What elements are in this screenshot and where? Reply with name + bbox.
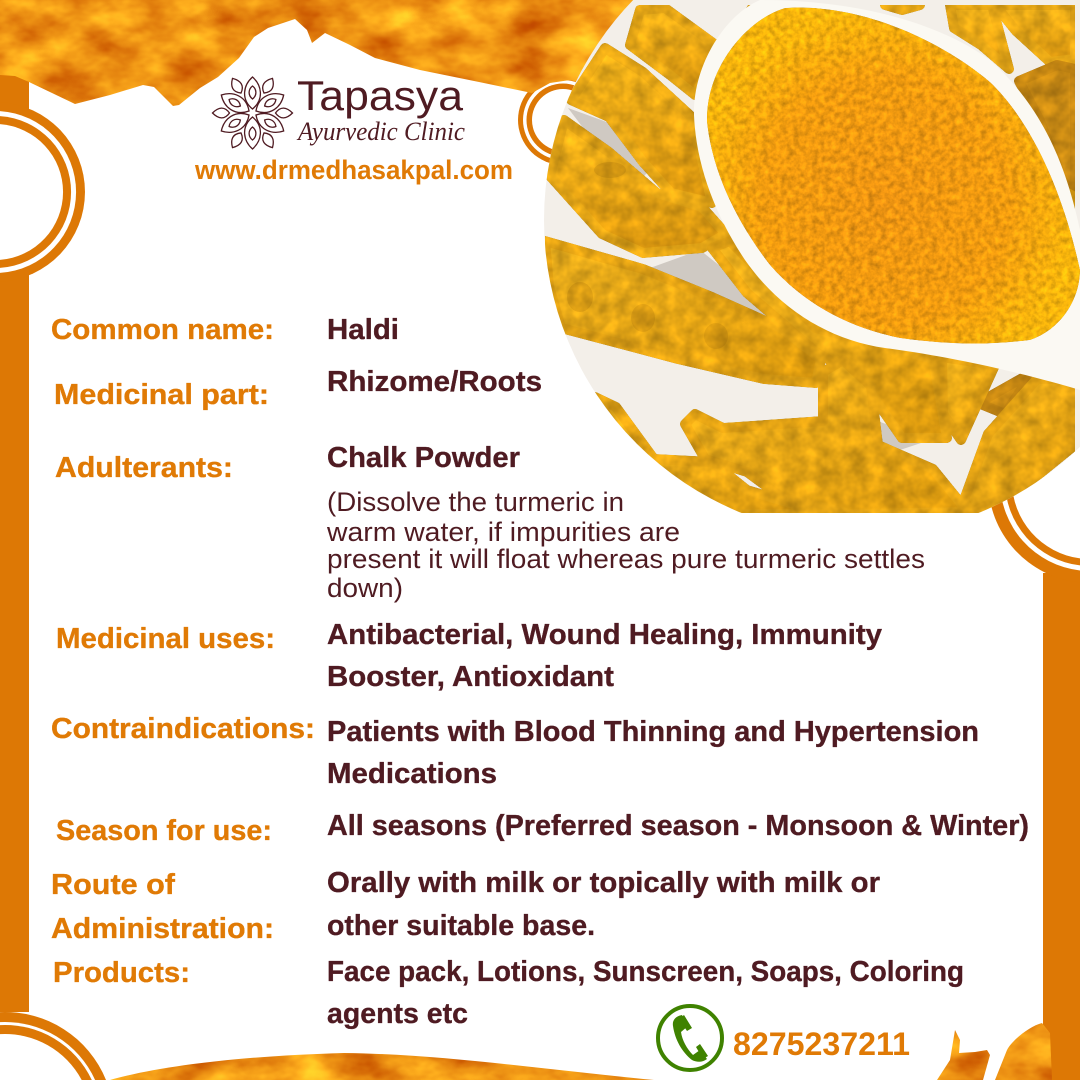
logo tagline: Ayurvedic Clinic (296, 117, 465, 146)
row: medicinal uses: Booster, Antioxidant (327, 661, 614, 693)
icon: phone (658, 1006, 722, 1070)
turmeric texture: bottom wave (110, 1053, 654, 1080)
phone number: 8275237211 (733, 1026, 910, 1062)
ring: top right (518, 75, 608, 165)
photo shadows (568, 108, 930, 450)
row: route of administration: Administration: (51, 913, 274, 945)
ring: bottom left (0, 1012, 106, 1080)
row: common name: Haldi (327, 314, 399, 346)
website url: www.drmedhasakpal.com (194, 155, 513, 185)
row: medicinal uses: Medicinal uses: (56, 623, 275, 655)
photo background (540, 0, 1080, 520)
icon: mandala (212, 76, 292, 150)
row: contraindications: Medications (327, 758, 497, 790)
row: contraindications (51, 713, 979, 790)
row: products: Face pack, Lotions, Sunscreen, Soaps, Coloring (327, 956, 964, 988)
row: season for use: All seasons (Preferred season - Monsoon & Winter) (327, 810, 1029, 842)
row: common name (51, 314, 399, 346)
photo: turmeric roots and powder spoon (540, 0, 1080, 520)
row: route of administration: Orally with milk or topically with milk or (327, 867, 880, 899)
right border bar (1043, 573, 1080, 1080)
row: medicinal part: Medicinal part: (54, 379, 269, 411)
row: adulterants: Chalk Powder (327, 442, 520, 474)
ring: mid right (988, 380, 1080, 582)
row: contraindications: Patients with Blood Thinning and Hypertension (327, 716, 979, 748)
turmeric blob: bottom right small (937, 1030, 990, 1080)
turmeric powder (707, 8, 1080, 344)
row: products (53, 956, 964, 1030)
turmeric blob: bottom right large (995, 1023, 1052, 1080)
row: adulterants: Adulterants: (55, 452, 233, 484)
turmeric texture: top band (0, 0, 720, 120)
logo: Tapasya Ayurvedic Clinic (212, 72, 465, 150)
row: route of administration: other suitable base. (327, 910, 595, 942)
row: adulterants (55, 442, 925, 603)
white spoon (694, 0, 1080, 390)
turmeric root pieces (545, 5, 1075, 514)
ring: top left (0, 102, 85, 282)
row: route of administration (51, 867, 880, 945)
row: medicinal uses (56, 619, 882, 693)
row: adulterants: (Dissolve the turmeric in (327, 487, 624, 517)
row: medicinal part (54, 366, 542, 411)
row: common name: Common name: (51, 314, 274, 346)
row: adulterants: down) (327, 573, 403, 603)
row: adulterants: warm water, if impurities are (326, 517, 680, 547)
row: season for use: Season for use: (56, 815, 272, 847)
row: adulterants: present it will float whereas pure turmeric settles (327, 544, 925, 574)
logo wordmark: Tapasya (297, 72, 464, 119)
row: contraindications: Contraindications: (51, 713, 315, 745)
left border bar (0, 75, 29, 1012)
row: medicinal part: Rhizome/Roots (327, 366, 542, 398)
row: route of administration: Route of (51, 869, 175, 901)
row: medicinal uses: Antibacterial, Wound Healing, Immunity (327, 619, 882, 651)
row: season for use (56, 810, 1029, 847)
row: products: Products: (53, 957, 190, 989)
row: products: agents etc (327, 998, 468, 1030)
